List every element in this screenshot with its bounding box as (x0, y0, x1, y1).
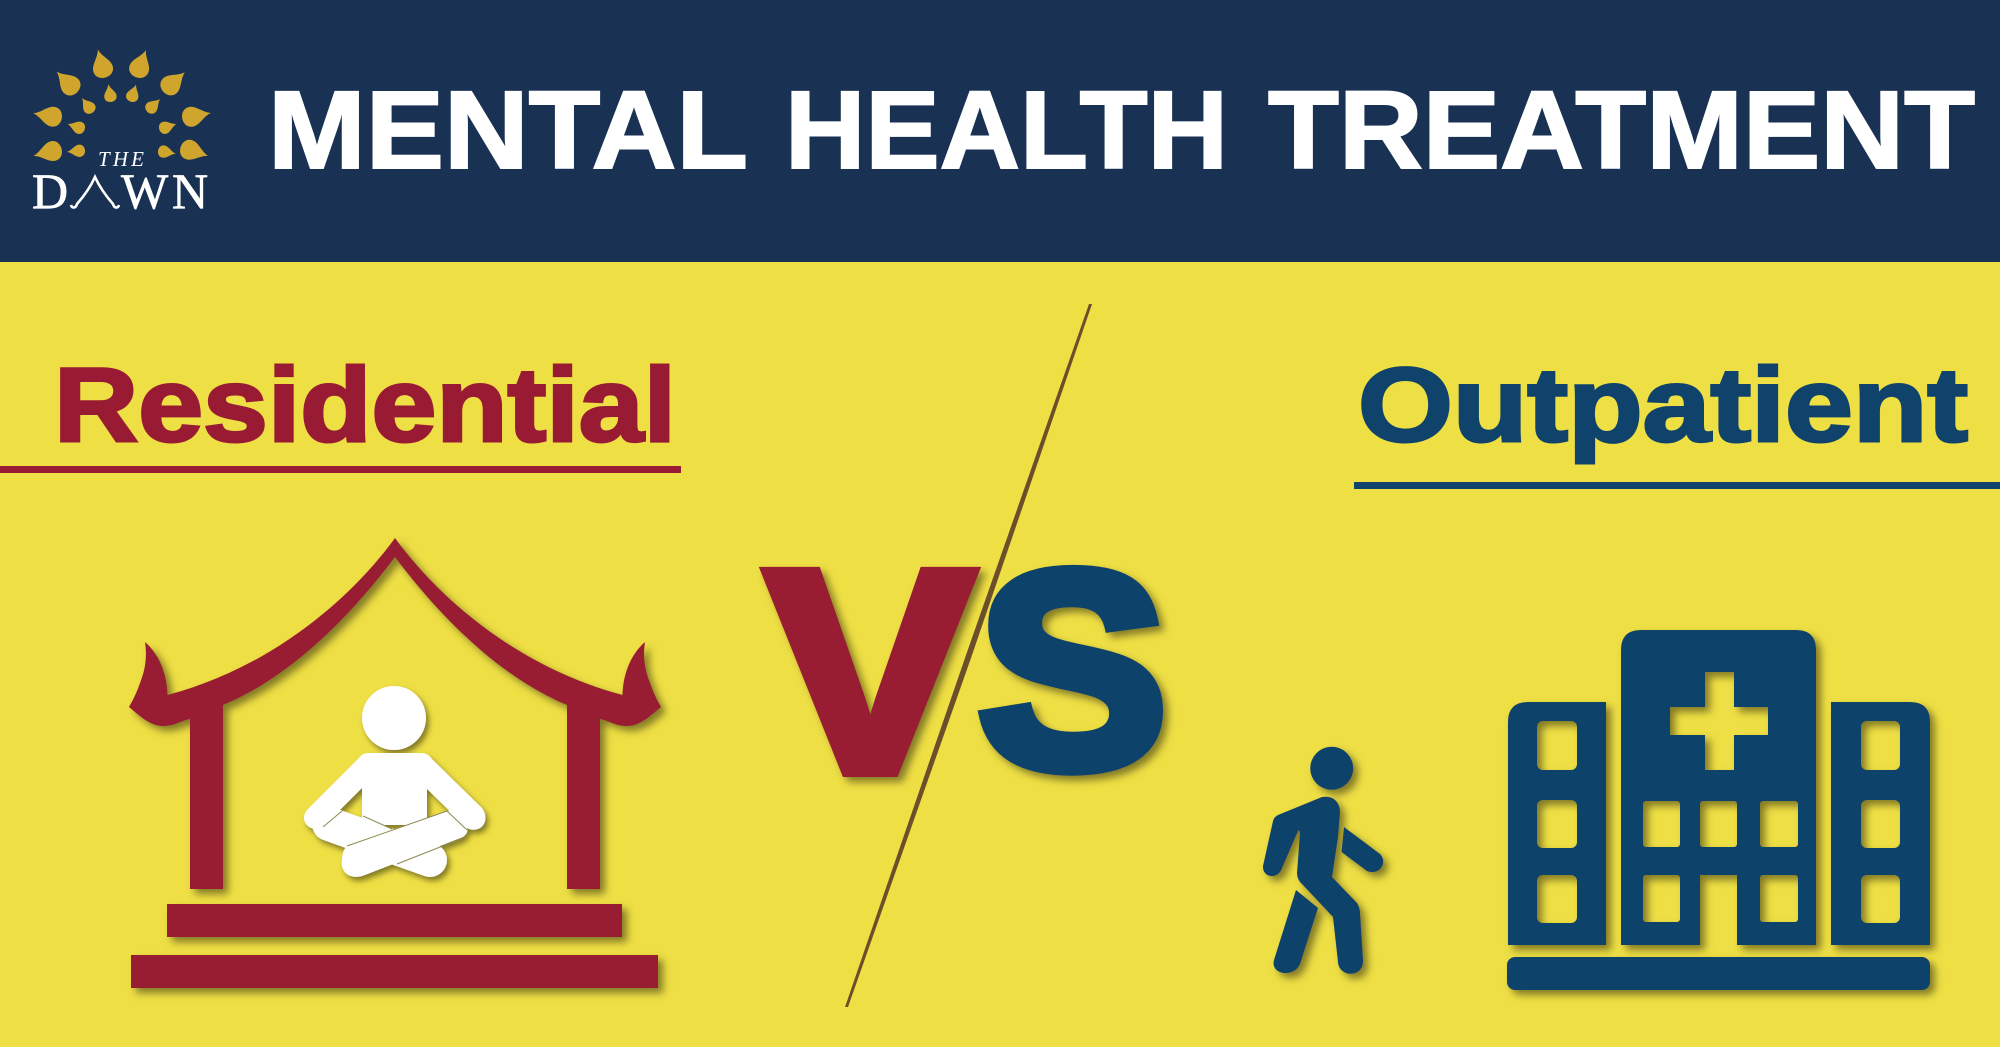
temple structure (129, 538, 661, 988)
logo: The Dawn (31, 47, 213, 219)
header band (0, 0, 2000, 262)
logo word: DAWN: W (121, 163, 169, 219)
letter S: S (978, 514, 1167, 825)
title: HEALTH (785, 69, 1228, 192)
logo roof glyph (71, 177, 119, 208)
title: TREATMENT (1268, 69, 1975, 192)
lower platform (131, 955, 658, 988)
main tower (1621, 630, 1816, 945)
head (362, 686, 426, 750)
title: MENTAL (268, 69, 748, 192)
back leg (329, 824, 430, 860)
rear leg (1274, 890, 1318, 973)
head (1310, 747, 1353, 790)
limb separators (323, 811, 467, 864)
far arm (1342, 827, 1383, 872)
icon: walking person (1263, 747, 1383, 974)
underline: Residential (0, 466, 681, 473)
logo petals (31, 47, 213, 166)
roof and columns (129, 538, 661, 889)
logo word: DAWN: N (172, 163, 208, 219)
heading: Outpatient: Outpatient (1358, 347, 1968, 464)
heading: Residential: Residential (54, 347, 676, 464)
icon: hospital building (1507, 630, 1930, 990)
front leg (342, 811, 467, 877)
VS label (766, 511, 1167, 833)
upper platform (167, 904, 622, 937)
letter V: V (766, 511, 976, 833)
logo word: DAWN: D (32, 163, 68, 219)
logo word: THE: THE (98, 147, 144, 171)
title (268, 69, 1975, 192)
left wing (1508, 702, 1606, 945)
right wing (1831, 702, 1930, 945)
torso, near arm and front leg (1263, 797, 1363, 974)
ground bar (1507, 957, 1930, 990)
underline: Outpatient (1354, 482, 2000, 489)
icon: temple with meditating person (129, 538, 661, 988)
meditating person (304, 686, 485, 877)
diagonal divider (845, 304, 1092, 1007)
torso and arms (304, 753, 485, 830)
